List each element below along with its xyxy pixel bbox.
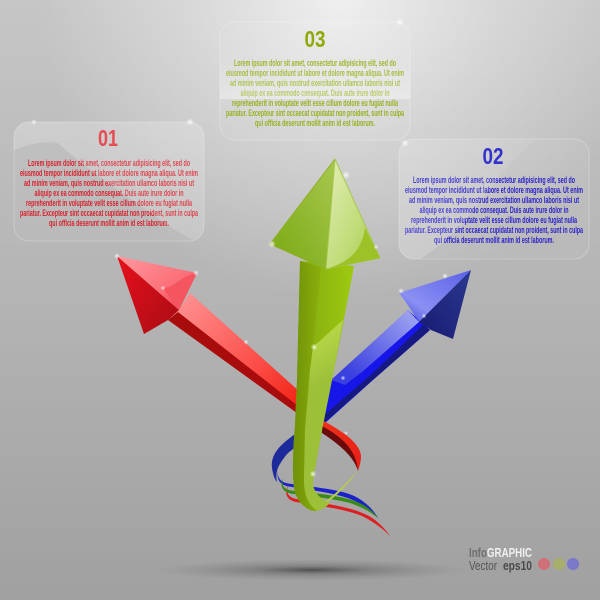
logo text: eps10 <box>503 559 532 573</box>
green shaft highlight <box>304 320 343 510</box>
blue arrow head <box>399 270 471 322</box>
body text 01: reprehenderit in voluptate velit esse cillum dolore eu fugiat nulla <box>26 198 193 208</box>
thin green-yellow ribbon <box>316 470 358 508</box>
logo text: Vector <box>469 559 497 573</box>
logo text <box>469 546 532 573</box>
blue ribbon tail <box>272 432 298 482</box>
ground shadow <box>152 559 472 581</box>
blue arrow <box>272 270 471 518</box>
red arrow <box>117 256 390 536</box>
red shaft <box>168 293 300 413</box>
panel 01: red text card <box>14 120 210 241</box>
body text 01: Lorem ipsum dolor sit amet, consectetur adipisicing elit, sed do <box>28 158 190 168</box>
green shaft <box>293 261 354 511</box>
body text 03: ad minim veniam, quis nostrud exercitation ullamco laboris nisi ut <box>230 78 400 88</box>
blue thin ribbon <box>278 470 378 518</box>
body text 01: qui officia deserunt mollit anim id est laborum. <box>49 218 169 228</box>
body text 02 <box>405 175 584 245</box>
red arrow head <box>117 256 179 334</box>
body text 01: ad minim veniam, quis nostrud exercitation ullamco laboris nisi ut <box>24 178 194 188</box>
body text 03: reprehenderit in voluptate velit esse cillum dolore eu fugiat nulla <box>232 98 399 108</box>
sparkles <box>31 18 448 478</box>
body text 01: pariatur. Excepteur sint occaecat cupidatat non proident, sunt in culpa <box>20 208 199 218</box>
body text 03: aliquip ex ea commodo consequat. Duis aute irure dolor in <box>240 88 390 98</box>
panel 02: blue text card <box>395 135 589 262</box>
red ribbon tail <box>322 420 361 471</box>
logo text: InfoGRAPHIC <box>469 546 532 560</box>
body text 01: aliquip ex ea commodo consequat. Duis aute irure dolor in <box>34 188 184 198</box>
blue shaft <box>310 310 430 424</box>
legend dots <box>538 558 579 570</box>
body text 03: Lorem ipsum dolor sit amet, consectetur adipisicing elit, sed do <box>234 58 396 68</box>
green arrow <box>270 159 380 511</box>
number 03: 03 <box>304 26 326 52</box>
panel 03: green text card <box>220 22 410 140</box>
green thin ribbon <box>281 478 379 519</box>
body text 03 <box>226 58 405 128</box>
green arrow head <box>270 159 335 269</box>
body text 01: eiusmod tempor incididunt ut labore et dolore magna aliqua. Ut enim <box>20 168 198 178</box>
body text 01 <box>20 158 199 228</box>
body text 03: qui officia deserunt mollit anim id est laborum. <box>255 118 375 128</box>
red thin ribbon <box>286 485 390 536</box>
number 02: 02 <box>482 143 504 169</box>
number 01: 01 <box>98 125 118 151</box>
body text 03: pariatur. Excepteur sint occaecat cupidatat non proident, sunt in culpa <box>226 108 405 118</box>
body text 03: eiusmod tempor incididunt ut labore et dolore magna aliqua. Ut enim <box>226 68 404 78</box>
